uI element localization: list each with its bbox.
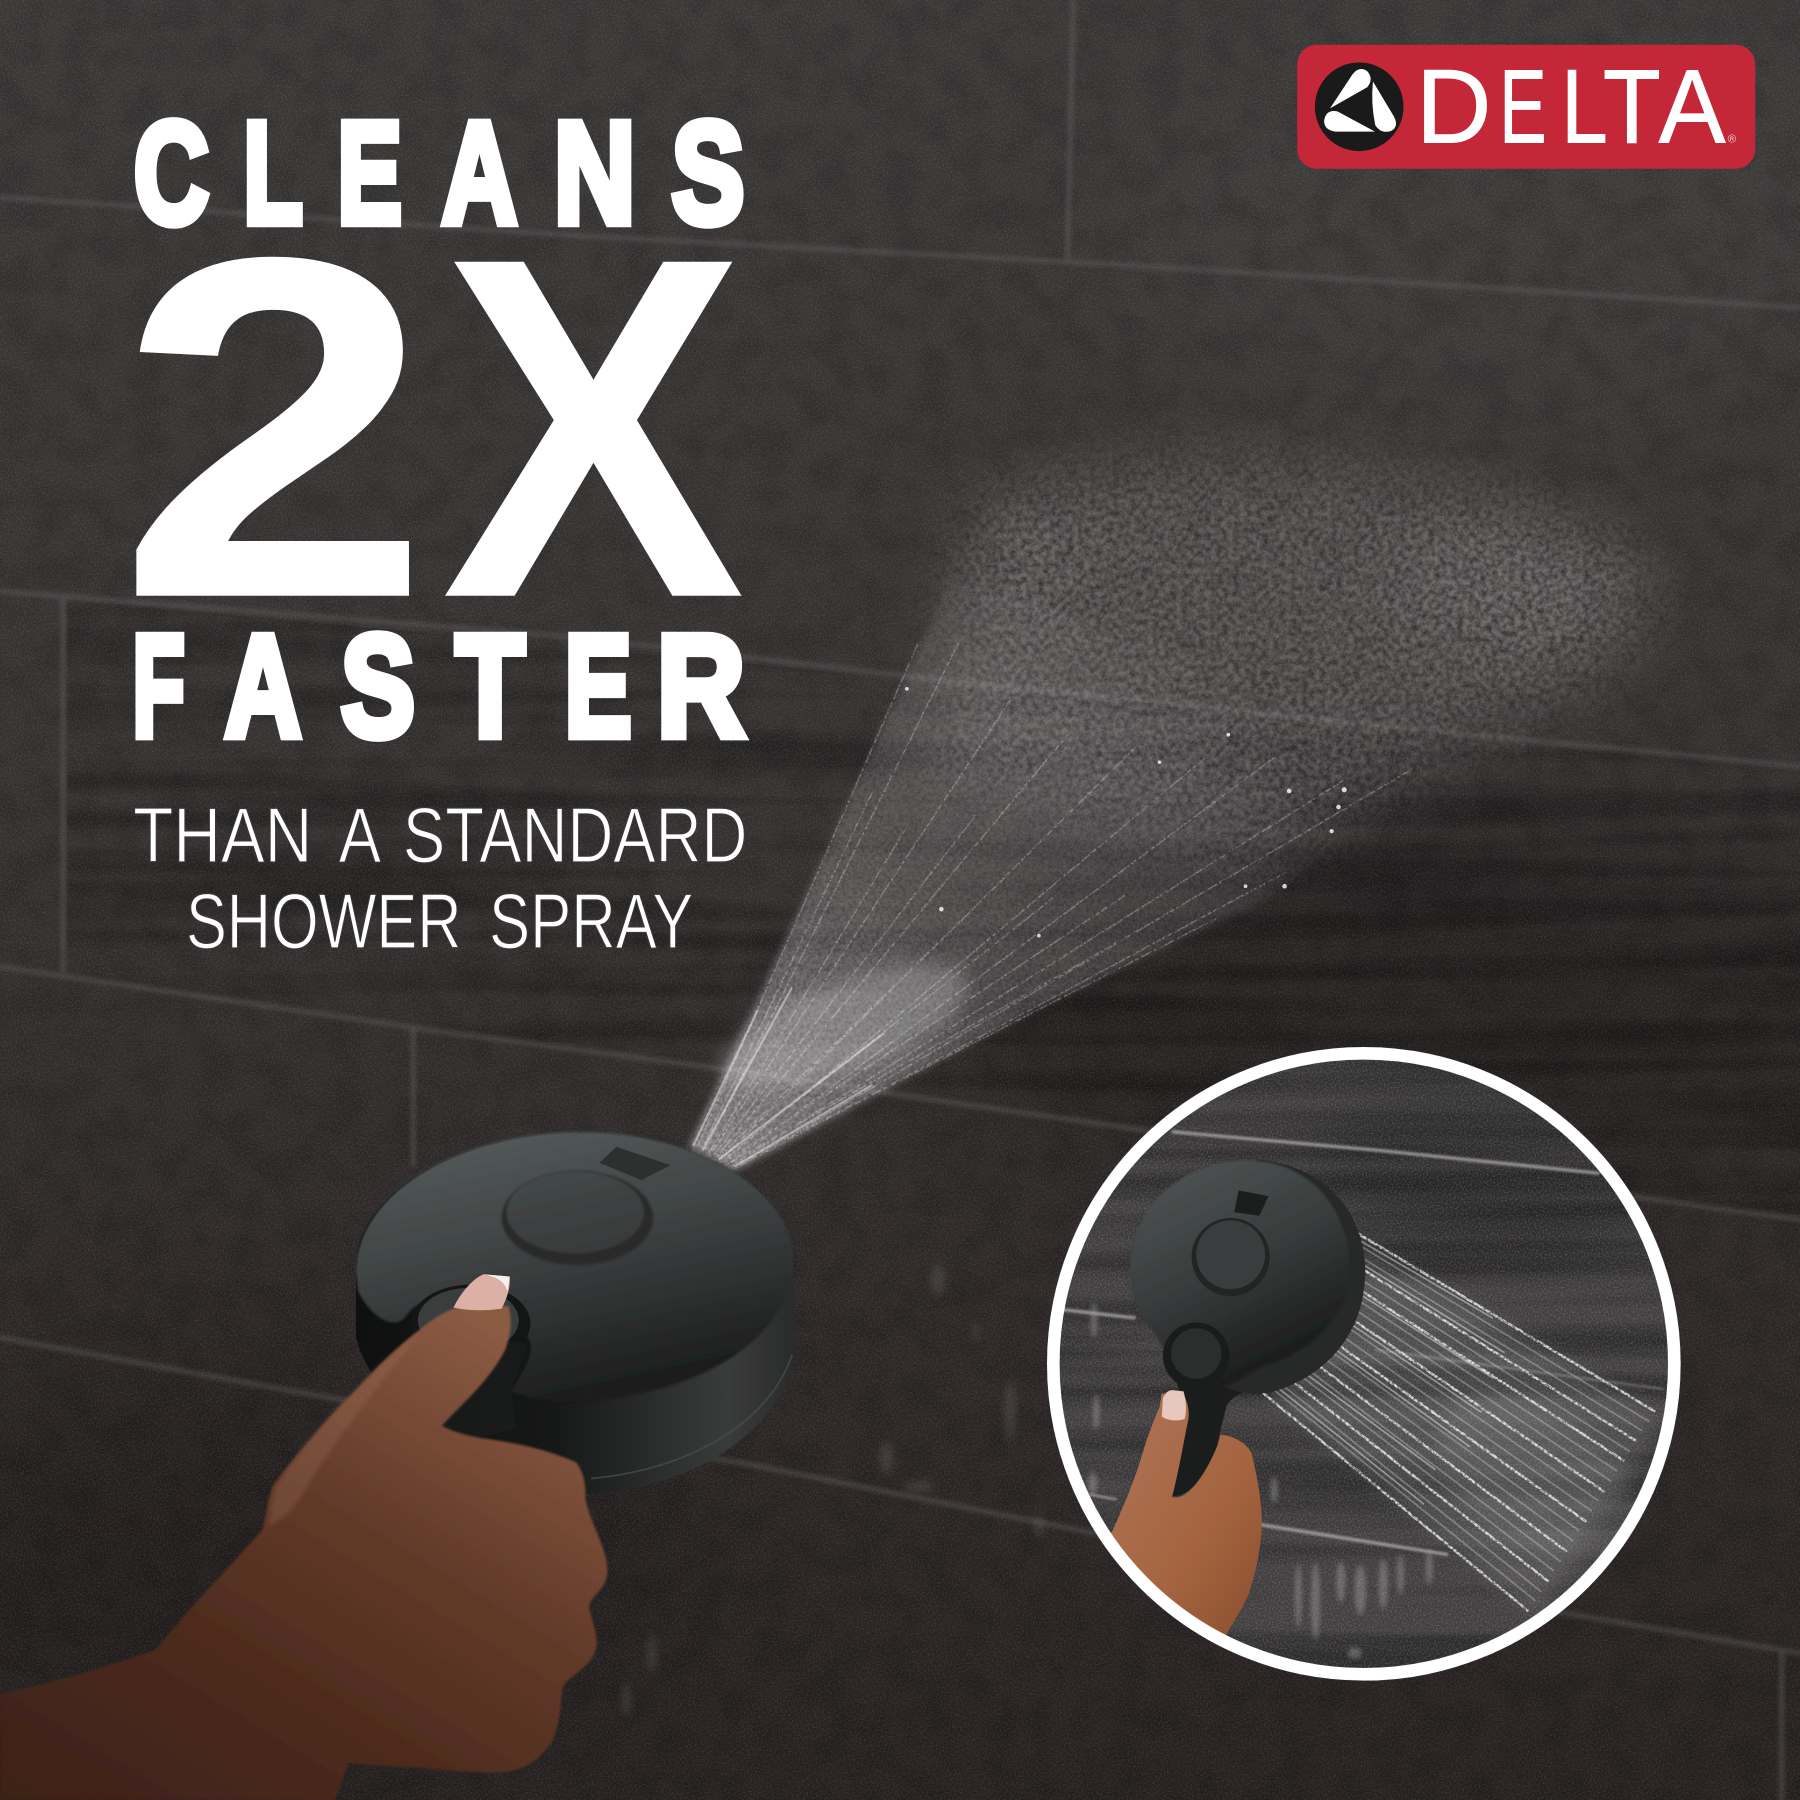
main hand shower head xyxy=(356,1132,794,1493)
2X: X xyxy=(441,156,748,699)
FASTER: F xyxy=(132,606,185,767)
FASTER xyxy=(132,604,745,767)
line two: SPRAY xyxy=(489,877,693,965)
FASTER: E xyxy=(565,606,632,767)
line two: SHOWER xyxy=(186,877,461,965)
shower head body side xyxy=(356,1132,794,1493)
CLEANS: E xyxy=(338,93,402,254)
FASTER: T xyxy=(456,606,525,767)
registered mark: ® xyxy=(1728,133,1737,145)
line one: THAN xyxy=(133,791,312,879)
spray selector disc xyxy=(502,1171,653,1265)
CLEANS xyxy=(134,92,744,254)
near spray fan xyxy=(689,574,1481,1171)
thumb nail xyxy=(453,1274,510,1310)
line two xyxy=(186,877,693,965)
inset hand shower xyxy=(1130,1159,1365,1496)
icon: Delta triangle mark xyxy=(1315,62,1403,151)
line one: A xyxy=(339,791,381,879)
Delta logo badge xyxy=(1297,45,1755,169)
CLEANS: L xyxy=(243,92,303,254)
wordmark: A xyxy=(1659,47,1726,165)
inset circle border xyxy=(1053,1053,1674,1674)
CLEANS: N xyxy=(554,93,635,254)
inset thumb nail xyxy=(1162,1390,1186,1420)
thumb button xyxy=(402,1285,530,1441)
water spray fan xyxy=(689,457,1648,1171)
thumb highlight xyxy=(267,1332,420,1527)
CLEANS: S xyxy=(672,93,744,254)
wordmark: T xyxy=(1603,49,1661,165)
shower head domed face xyxy=(356,1132,793,1402)
inset circle: spray close-up xyxy=(1047,1047,1710,1681)
shower head rim xyxy=(591,1355,792,1479)
far mist cloud xyxy=(918,457,1648,872)
CLEANS: C xyxy=(134,92,209,254)
inset handle xyxy=(1167,1332,1263,1496)
subheading xyxy=(133,791,747,965)
line one xyxy=(133,791,747,879)
line one: STANDARD xyxy=(403,791,747,879)
FASTER: A xyxy=(225,604,301,767)
inset head rim xyxy=(1194,1159,1365,1394)
2X xyxy=(117,156,748,699)
wordmark: D xyxy=(1416,48,1491,165)
wordmark: L xyxy=(1561,48,1608,166)
hand pressing the button xyxy=(0,1274,607,1800)
water drips xyxy=(1088,1302,1433,1659)
inset hand xyxy=(1109,1394,1262,1637)
inset window xyxy=(1234,1190,1268,1216)
mode indicator window xyxy=(599,1147,670,1180)
wordmark: E xyxy=(1499,48,1547,165)
headline xyxy=(117,92,748,767)
FASTER: R xyxy=(657,606,745,767)
FASTER: S xyxy=(341,606,415,767)
2X: 2 xyxy=(117,157,432,699)
inset selector disc xyxy=(1192,1218,1270,1296)
inset spray streaks xyxy=(1264,1233,1672,1619)
wordmark xyxy=(1416,47,1726,166)
inset head dome xyxy=(1130,1161,1350,1387)
inset thumb button xyxy=(1163,1322,1229,1389)
inset background xyxy=(1060,1060,1668,1668)
CLEANS: A xyxy=(442,92,517,254)
